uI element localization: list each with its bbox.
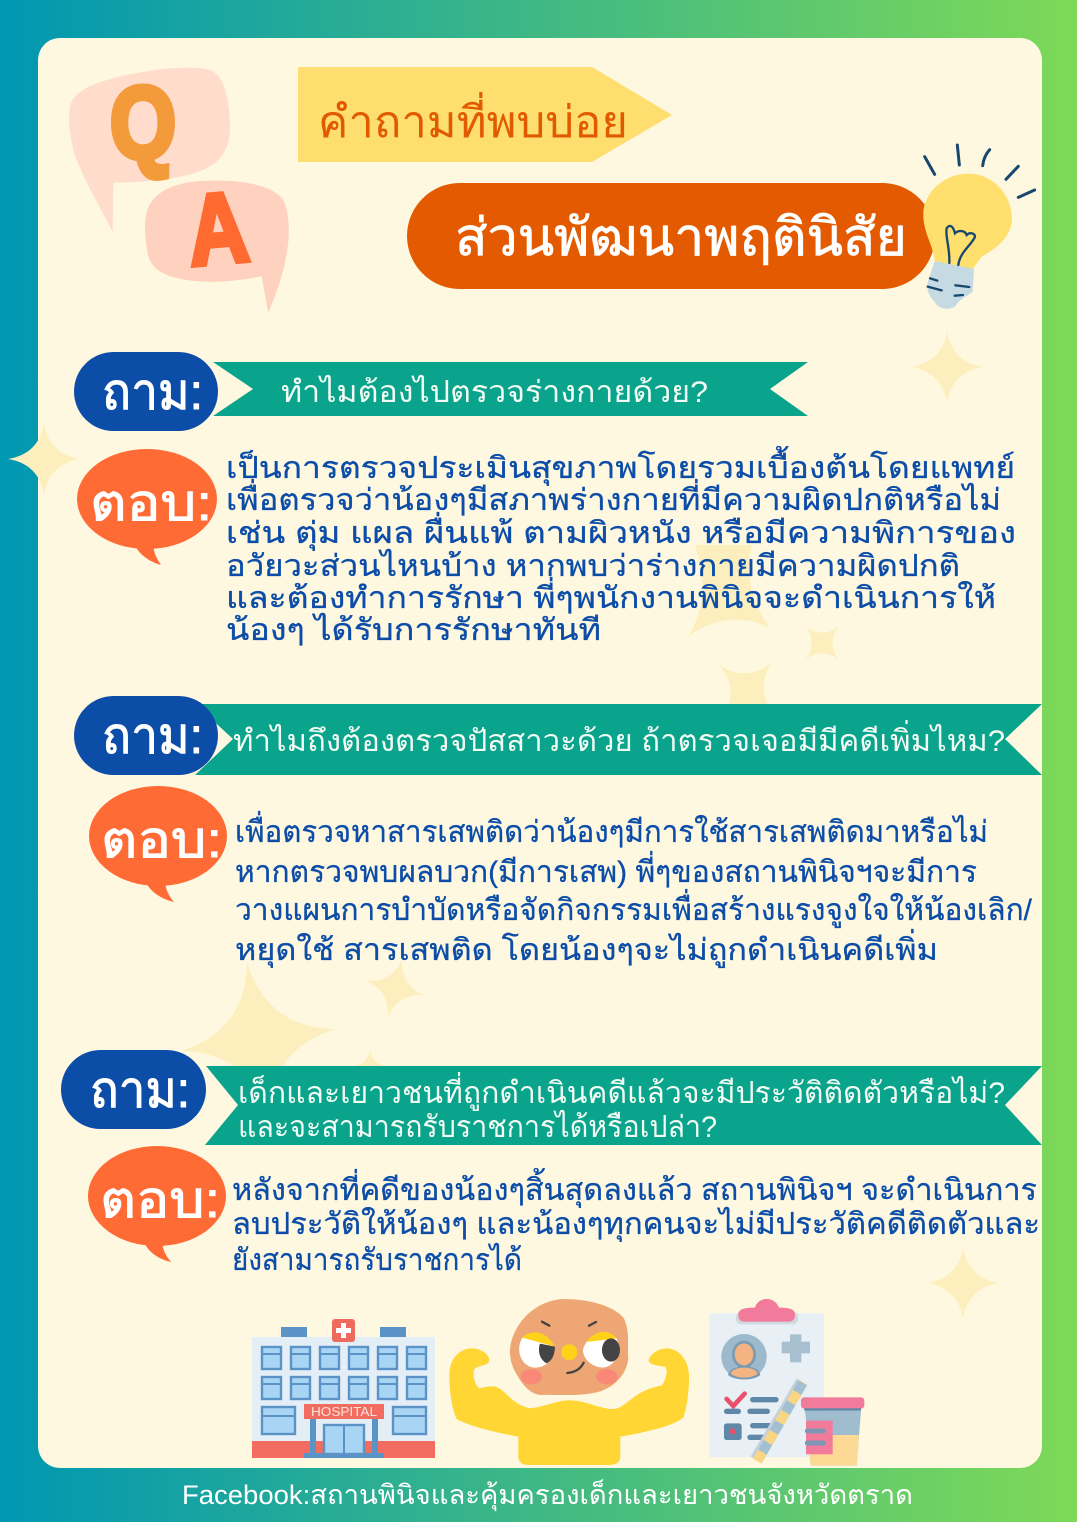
- answer 2 label bubble: ตอบ:: [101, 812, 222, 868]
- question 3 label pill: ถาม:: [90, 1062, 190, 1118]
- question 3 ribbon: เด็กและเยาวชนที่ถูกดำเนินคดีแล้วจะมีประวัติติดตัวหรือไม่?: [238, 1072, 1005, 1111]
- answer 1 label bubble: [77, 449, 217, 565]
- answer 3 label bubble: [88, 1146, 226, 1262]
- answer 1 text block: และต้องทำการรักษา พี่ๆพนักงานพินิจจะดำเนินการให้: [226, 577, 996, 615]
- answer 3 text block: [232, 1168, 1040, 1277]
- title pill: behaviour development section: [407, 183, 935, 289]
- question 1 label pill: ถาม:: [102, 364, 203, 420]
- icon: A speech bubble: A: [183, 171, 253, 287]
- question 3 label pill: [61, 1050, 206, 1129]
- answer 2 text block: หากตรวจพบผลบวก(มีการเสพ) พี่ๆของสถานพินิจฯจะมีการ: [235, 851, 977, 889]
- answer 1 text block: เช่น ตุ่ม แผล ผื่นแพ้ ตามผิวหนัง หรือมีความพิการของ: [226, 512, 1016, 552]
- icon: hospital building: [252, 1319, 435, 1458]
- answer 1 label bubble: ตอบ:: [90, 475, 212, 531]
- question 2 label pill: ถาม:: [102, 708, 203, 764]
- question 3 ribbon: และจะสามารถรับราชการได้หรือเปล่า?: [238, 1109, 717, 1144]
- icon: hospital building: HOSPITAL: [311, 1405, 377, 1419]
- icon: Q speech bubble: [69, 66, 230, 232]
- footer: Facebook credit: Facebook:สถานพินิจและคุ้มครองเด็กและเยาวชนจังหวัดตราด: [182, 1477, 913, 1512]
- background sparkles: [8, 331, 999, 1319]
- answer 3 label bubble: ตอบ:: [100, 1172, 220, 1228]
- icon: Q speech bubble: Q: [110, 66, 176, 180]
- answer 2 text block: วางแผนการบำบัดหรือจัดกิจกรรมเพื่อสร้างแรงจูงใจให้น้องเลิก/: [235, 889, 1033, 928]
- heading arrow: frequently asked questions: [298, 67, 672, 162]
- answer 3 text block: หลังจากที่คดีของน้องๆสิ้นสุดลงแล้ว สถานพินิจฯ จะดำเนินการ: [232, 1168, 1037, 1209]
- answer 1 text block: เพื่อตรวจว่าน้องๆมีสภาพร่างกายที่มีความผิดปกติหรือไม่: [226, 479, 1001, 517]
- question 3 ribbon: [205, 1066, 1042, 1145]
- answer 2 label bubble: [89, 786, 227, 902]
- icon: medical clipboard and urine test: [709, 1299, 864, 1466]
- answer 2 text block: [235, 811, 1033, 969]
- question 2 ribbon: ทำไมถึงต้องตรวจปัสสาวะด้วย ถ้าตรวจเจอมีมีคดีเพิ่มไหม?: [233, 720, 1005, 758]
- icon: light bulb: [923, 145, 1035, 309]
- icon: flexing character: [449, 1299, 689, 1465]
- heading arrow: frequently asked questions: คำถามที่พบบ่อย: [318, 91, 628, 147]
- answer 1 text block: [226, 446, 1016, 647]
- question 1 ribbon: ทำไมต้องไปตรวจร่างกายด้วย?: [281, 374, 708, 409]
- answer 3 text block: ลบประวัติให้น้องๆ และน้องๆทุกคนจะไม่มีประวัติคดีติดตัวและ: [232, 1206, 1040, 1243]
- answer 1 text block: น้องๆ ได้รับการรักษาทันที: [226, 612, 601, 647]
- question 1 ribbon: [213, 362, 808, 416]
- question 2 label pill: [74, 696, 218, 775]
- question 1 label pill: [74, 352, 218, 431]
- answer 1 text block: อวัยวะส่วนไหนบ้าง หากพบว่าร่างกายมีความผิดปกติ: [226, 548, 960, 583]
- answer 2 text block: หยุดใช้ สารเสพติด โดยน้องๆจะไม่ถูกดำเนินคดีเพิ่ม: [235, 929, 938, 969]
- answer 1 text block: เป็นการตรวจประเมินสุขภาพโดยรวมเบื้องต้นโดยแพทย์: [226, 446, 1015, 487]
- icon: A speech bubble: [145, 171, 289, 313]
- question 2 ribbon: [195, 704, 1042, 775]
- answer 3 text block: ยังสามารถรับราชการได้: [232, 1242, 522, 1277]
- answer 2 text block: เพื่อตรวจหาสารเสพติดว่าน้องๆมีการใช้สารเสพติดมาหรือไม่: [235, 811, 988, 849]
- title pill: behaviour development section: ส่วนพัฒนาพฤตินิสัย: [455, 209, 907, 267]
